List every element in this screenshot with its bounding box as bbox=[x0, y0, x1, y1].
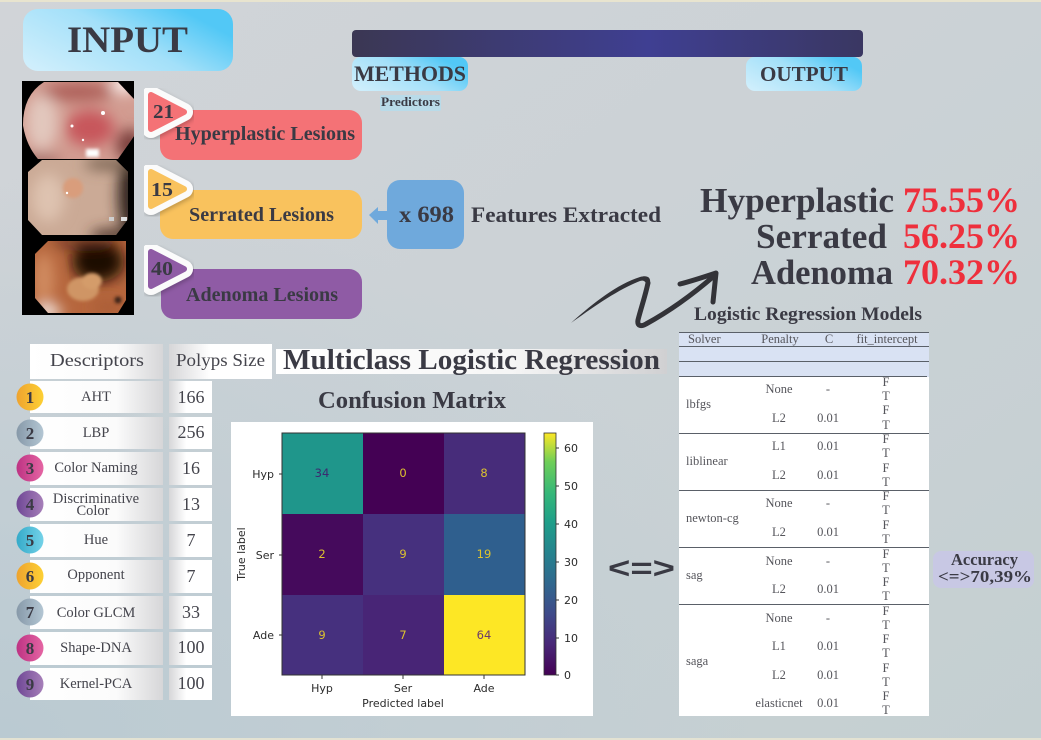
table: logistic regression models: F bbox=[883, 461, 890, 475]
row 7: 33 bbox=[182, 602, 200, 622]
heading: confusion matrix: Confusion Matrix bbox=[318, 388, 506, 414]
label: features extracted: Features Extracted bbox=[471, 202, 661, 227]
chart: confusion matrix: 8 bbox=[480, 466, 488, 480]
table: logistic regression models: L2 bbox=[772, 411, 786, 425]
row 6: 6 bbox=[26, 567, 34, 586]
badge: 21: 21 bbox=[153, 101, 174, 123]
row 8: Shape-DNA bbox=[60, 640, 132, 656]
row 6 bbox=[16, 560, 212, 593]
table: logistic regression models: L1 bbox=[772, 439, 786, 453]
row 9: 9 bbox=[26, 675, 34, 694]
row 9 bbox=[16, 668, 212, 700]
row 7: Color GLCM bbox=[57, 605, 135, 621]
row 8 bbox=[16, 632, 212, 665]
output scores: 70.32% bbox=[903, 252, 1020, 292]
table: logistic regression models: T bbox=[882, 646, 890, 660]
panel: hyperplastic lesions: Hyperplastic Lesions bbox=[175, 123, 355, 145]
chart: confusion matrix: Ade bbox=[473, 682, 495, 695]
chart: confusion matrix: 9 bbox=[399, 547, 407, 561]
row 5 bbox=[16, 524, 212, 557]
row 7: 7 bbox=[26, 603, 35, 622]
label: predictors: Predictors bbox=[381, 94, 440, 109]
callout: accuracy: <=>70,39% bbox=[938, 567, 1032, 586]
header: descriptors: Descriptors bbox=[50, 350, 144, 370]
callout: accuracy: Accuracy bbox=[951, 550, 1018, 569]
table: logistic regression models: - bbox=[826, 496, 830, 510]
colorbar: 60 bbox=[564, 442, 578, 455]
table: logistic regression models: sag bbox=[686, 568, 703, 582]
colorbar: 10 bbox=[564, 632, 578, 645]
chart: confusion matrix: Ade bbox=[253, 629, 274, 642]
row 9: Kernel-PCA bbox=[60, 676, 133, 692]
table: logistic regression models: T bbox=[882, 561, 890, 575]
panel: endoscopy images bbox=[22, 81, 134, 315]
table: logistic regression models: T bbox=[882, 675, 890, 689]
output scores: 75.55% bbox=[903, 180, 1020, 220]
table: logistic regression models: F bbox=[883, 604, 890, 618]
panel: adenoma lesions bbox=[151, 252, 362, 319]
row 3: 3 bbox=[26, 459, 34, 478]
panel: adenoma lesions: Adenoma Lesions bbox=[186, 284, 338, 306]
table: logistic regression models: F bbox=[883, 403, 890, 417]
table: logistic regression models: T bbox=[882, 389, 890, 403]
table: logistic regression models: 0.01 bbox=[817, 696, 839, 710]
table: logistic regression models: F bbox=[883, 375, 890, 389]
row 9: 100 bbox=[178, 673, 204, 693]
chart: confusion matrix: 2 bbox=[318, 547, 326, 561]
colorbar bbox=[544, 433, 578, 682]
badge: 40: 40 bbox=[151, 258, 173, 280]
heading: multiclass logistic regression: Multiclass Logistic Regression bbox=[283, 345, 660, 376]
table: logistic regression models: 0.01 bbox=[817, 639, 839, 653]
heading: output bbox=[746, 57, 862, 91]
table: logistic regression models: 0.01 bbox=[817, 439, 839, 453]
symbol: equivalence: <=> bbox=[608, 552, 675, 585]
table: logistic regression models: None bbox=[765, 382, 793, 396]
row 1: 1 bbox=[26, 388, 34, 407]
output scores: Adenoma bbox=[751, 253, 893, 292]
table: logistic regression models: T bbox=[882, 532, 890, 546]
panel: serrated lesions bbox=[151, 172, 362, 239]
image: adenoma polyp bbox=[35, 241, 126, 313]
table: logistic regression models: newton-cg bbox=[686, 511, 740, 525]
chart: confusion matrix bbox=[231, 422, 593, 716]
chart: confusion matrix: 64 bbox=[477, 628, 491, 642]
row 4: Discriminative bbox=[53, 491, 139, 507]
panel: features count bbox=[387, 180, 464, 249]
row 7 bbox=[16, 596, 212, 629]
table: logistic regression models: F bbox=[883, 689, 890, 703]
row 5: Hue bbox=[84, 532, 108, 548]
table: logistic regression models: lbfgs bbox=[686, 397, 711, 411]
colorbar: 30 bbox=[564, 556, 578, 569]
table: logistic regression models: T bbox=[882, 589, 890, 603]
row 4 bbox=[16, 488, 212, 521]
panel: serrated lesions: Serrated Lesions bbox=[189, 204, 334, 226]
chart: confusion matrix: Hyp bbox=[311, 682, 333, 695]
row 3 bbox=[16, 452, 212, 485]
row 8: 8 bbox=[26, 639, 34, 658]
output scores: 56.25% bbox=[903, 216, 1020, 256]
chart: confusion matrix: 7 bbox=[399, 628, 407, 642]
row 1: AHT bbox=[81, 389, 111, 405]
output scores: Hyperplastic bbox=[700, 181, 894, 220]
heading: output: OUTPUT bbox=[760, 62, 848, 86]
table: logistic regression models: T bbox=[882, 618, 890, 632]
table: logistic regression models: L2 bbox=[772, 468, 786, 482]
colorbar: 50 bbox=[564, 480, 578, 493]
table: logistic regression models: saga bbox=[686, 654, 709, 668]
table: logistic regression models: Solver bbox=[688, 332, 721, 346]
panel: input header bbox=[23, 9, 233, 71]
table: logistic regression models: L1 bbox=[772, 639, 786, 653]
row 2: 2 bbox=[26, 424, 34, 443]
chart: confusion matrix: 9 bbox=[318, 628, 326, 642]
panel: input header: INPUT bbox=[67, 20, 188, 61]
colorbar: 20 bbox=[564, 594, 578, 607]
chart: confusion matrix: 0 bbox=[399, 466, 407, 480]
row 3: 16 bbox=[182, 458, 200, 478]
header: polyps size bbox=[169, 344, 272, 379]
row 4: 13 bbox=[182, 494, 200, 514]
row 2 bbox=[16, 417, 212, 449]
table: logistic regression models: T bbox=[882, 503, 890, 517]
badge: 21 bbox=[151, 95, 184, 129]
colorbar: 0 bbox=[564, 669, 571, 682]
table: logistic regression models: liblinear bbox=[686, 454, 728, 468]
table: logistic regression models: 0.01 bbox=[817, 582, 839, 596]
table: logistic regression models: None bbox=[765, 496, 793, 510]
row 4: 4 bbox=[26, 495, 35, 514]
badge: 15 bbox=[151, 172, 184, 206]
row 3: Color Naming bbox=[54, 460, 138, 476]
table: logistic regression models: fit_intercept bbox=[856, 332, 918, 346]
chart: confusion matrix: 34 bbox=[315, 466, 329, 480]
table: logistic regression models: 0.01 bbox=[817, 411, 839, 425]
table: logistic regression models: elasticnet bbox=[755, 696, 803, 710]
row 2: 256 bbox=[178, 422, 204, 442]
panel: hyperplastic lesions bbox=[151, 95, 362, 160]
output scores bbox=[700, 180, 1020, 292]
table: logistic regression models: T bbox=[882, 475, 890, 489]
table: logistic regression models: Penalty bbox=[761, 332, 799, 346]
row 1: 166 bbox=[178, 387, 204, 407]
chart: confusion matrix: Ser bbox=[394, 682, 413, 695]
row 5: 7 bbox=[186, 530, 196, 550]
row 4: Color bbox=[76, 503, 110, 519]
table: logistic regression models: T bbox=[882, 418, 890, 432]
table: logistic regression models: F bbox=[883, 661, 890, 675]
chart: confusion matrix: Ser bbox=[256, 549, 274, 562]
table: logistic regression models: C bbox=[825, 332, 833, 346]
table: logistic regression models: F bbox=[883, 547, 890, 561]
table: logistic regression models: T bbox=[882, 446, 890, 460]
table: logistic regression models: F bbox=[883, 575, 890, 589]
badge: 15: 15 bbox=[151, 179, 173, 201]
table: logistic regression models: 0.01 bbox=[817, 525, 839, 539]
heading: logistic regression models: Logistic Regression Models bbox=[694, 304, 922, 325]
table: logistic regression models bbox=[679, 332, 929, 717]
table: logistic regression models: - bbox=[826, 611, 830, 625]
table: logistic regression models: L2 bbox=[772, 668, 786, 682]
table: logistic regression models: None bbox=[765, 554, 793, 568]
header: descriptors bbox=[30, 344, 163, 379]
image: serrated polyp bbox=[28, 160, 128, 235]
table: logistic regression models: - bbox=[826, 382, 830, 396]
header: polyps size: Polyps Size bbox=[176, 350, 265, 370]
table: logistic regression models: None bbox=[765, 611, 793, 625]
row 6: 7 bbox=[186, 566, 196, 586]
badge: 40 bbox=[151, 252, 184, 286]
table: logistic regression models: L2 bbox=[772, 582, 786, 596]
row 2: LBP bbox=[83, 425, 109, 441]
heading: methods: METHODS bbox=[354, 61, 466, 86]
chart: confusion matrix: 19 bbox=[477, 547, 491, 561]
panel: features count: x 698 bbox=[399, 202, 454, 227]
table: logistic regression models: F bbox=[883, 432, 890, 446]
row 6: Opponent bbox=[67, 567, 125, 583]
table: logistic regression models: F bbox=[883, 489, 890, 503]
colorbar: 40 bbox=[564, 518, 578, 531]
table: logistic regression models: 0.01 bbox=[817, 468, 839, 482]
arrow: features to lesions bbox=[369, 207, 388, 224]
table: logistic regression models: T bbox=[882, 703, 890, 717]
table: logistic regression models: 0.01 bbox=[817, 668, 839, 682]
output scores: Serrated bbox=[756, 217, 888, 256]
row 5: 5 bbox=[26, 531, 34, 550]
row 8: 100 bbox=[178, 637, 204, 657]
timeline bar bbox=[352, 30, 863, 57]
table: logistic regression models: - bbox=[826, 554, 830, 568]
image: hyperplastic polyp bbox=[23, 82, 134, 159]
table: logistic regression models: F bbox=[883, 632, 890, 646]
row 1 bbox=[16, 381, 212, 413]
panel: descriptors table bbox=[16, 344, 272, 700]
callout: accuracy bbox=[933, 550, 1034, 588]
chart: confusion matrix: Predicted label bbox=[362, 697, 444, 710]
chart: confusion matrix: Hyp bbox=[252, 468, 274, 481]
chart: confusion matrix: True label bbox=[235, 527, 248, 582]
table: logistic regression models: F bbox=[883, 518, 890, 532]
table: logistic regression models: L2 bbox=[772, 525, 786, 539]
arrow: squiggle to output bbox=[571, 273, 716, 326]
